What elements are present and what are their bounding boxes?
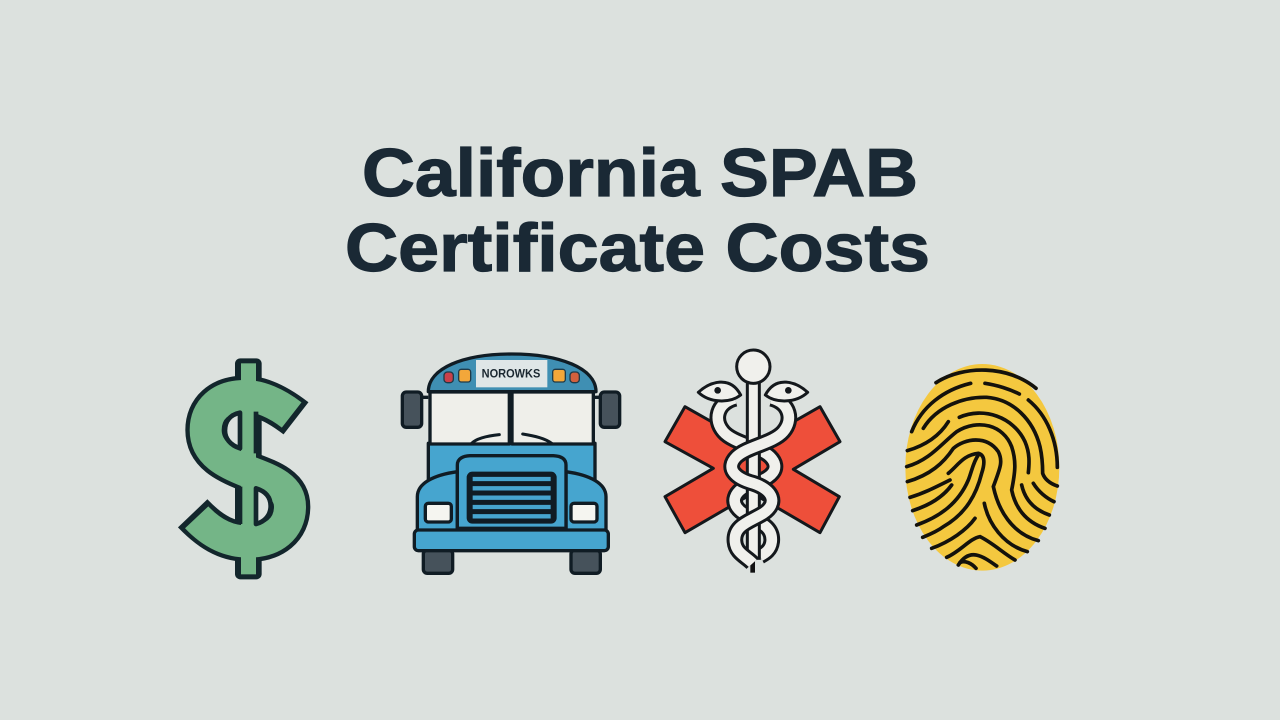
icon: fingerprint xyxy=(905,364,1059,571)
right snake head xyxy=(765,382,808,401)
icon: school bus xyxy=(402,354,620,573)
icon: dollar sign xyxy=(193,358,296,579)
title: Certificate Costs xyxy=(345,210,930,286)
title: California SPAB xyxy=(362,135,918,211)
icon: school bus: NOROWKS xyxy=(482,366,540,380)
left snake head xyxy=(698,382,741,401)
icon: medical cross with caduceus xyxy=(665,350,840,573)
title xyxy=(345,135,930,286)
